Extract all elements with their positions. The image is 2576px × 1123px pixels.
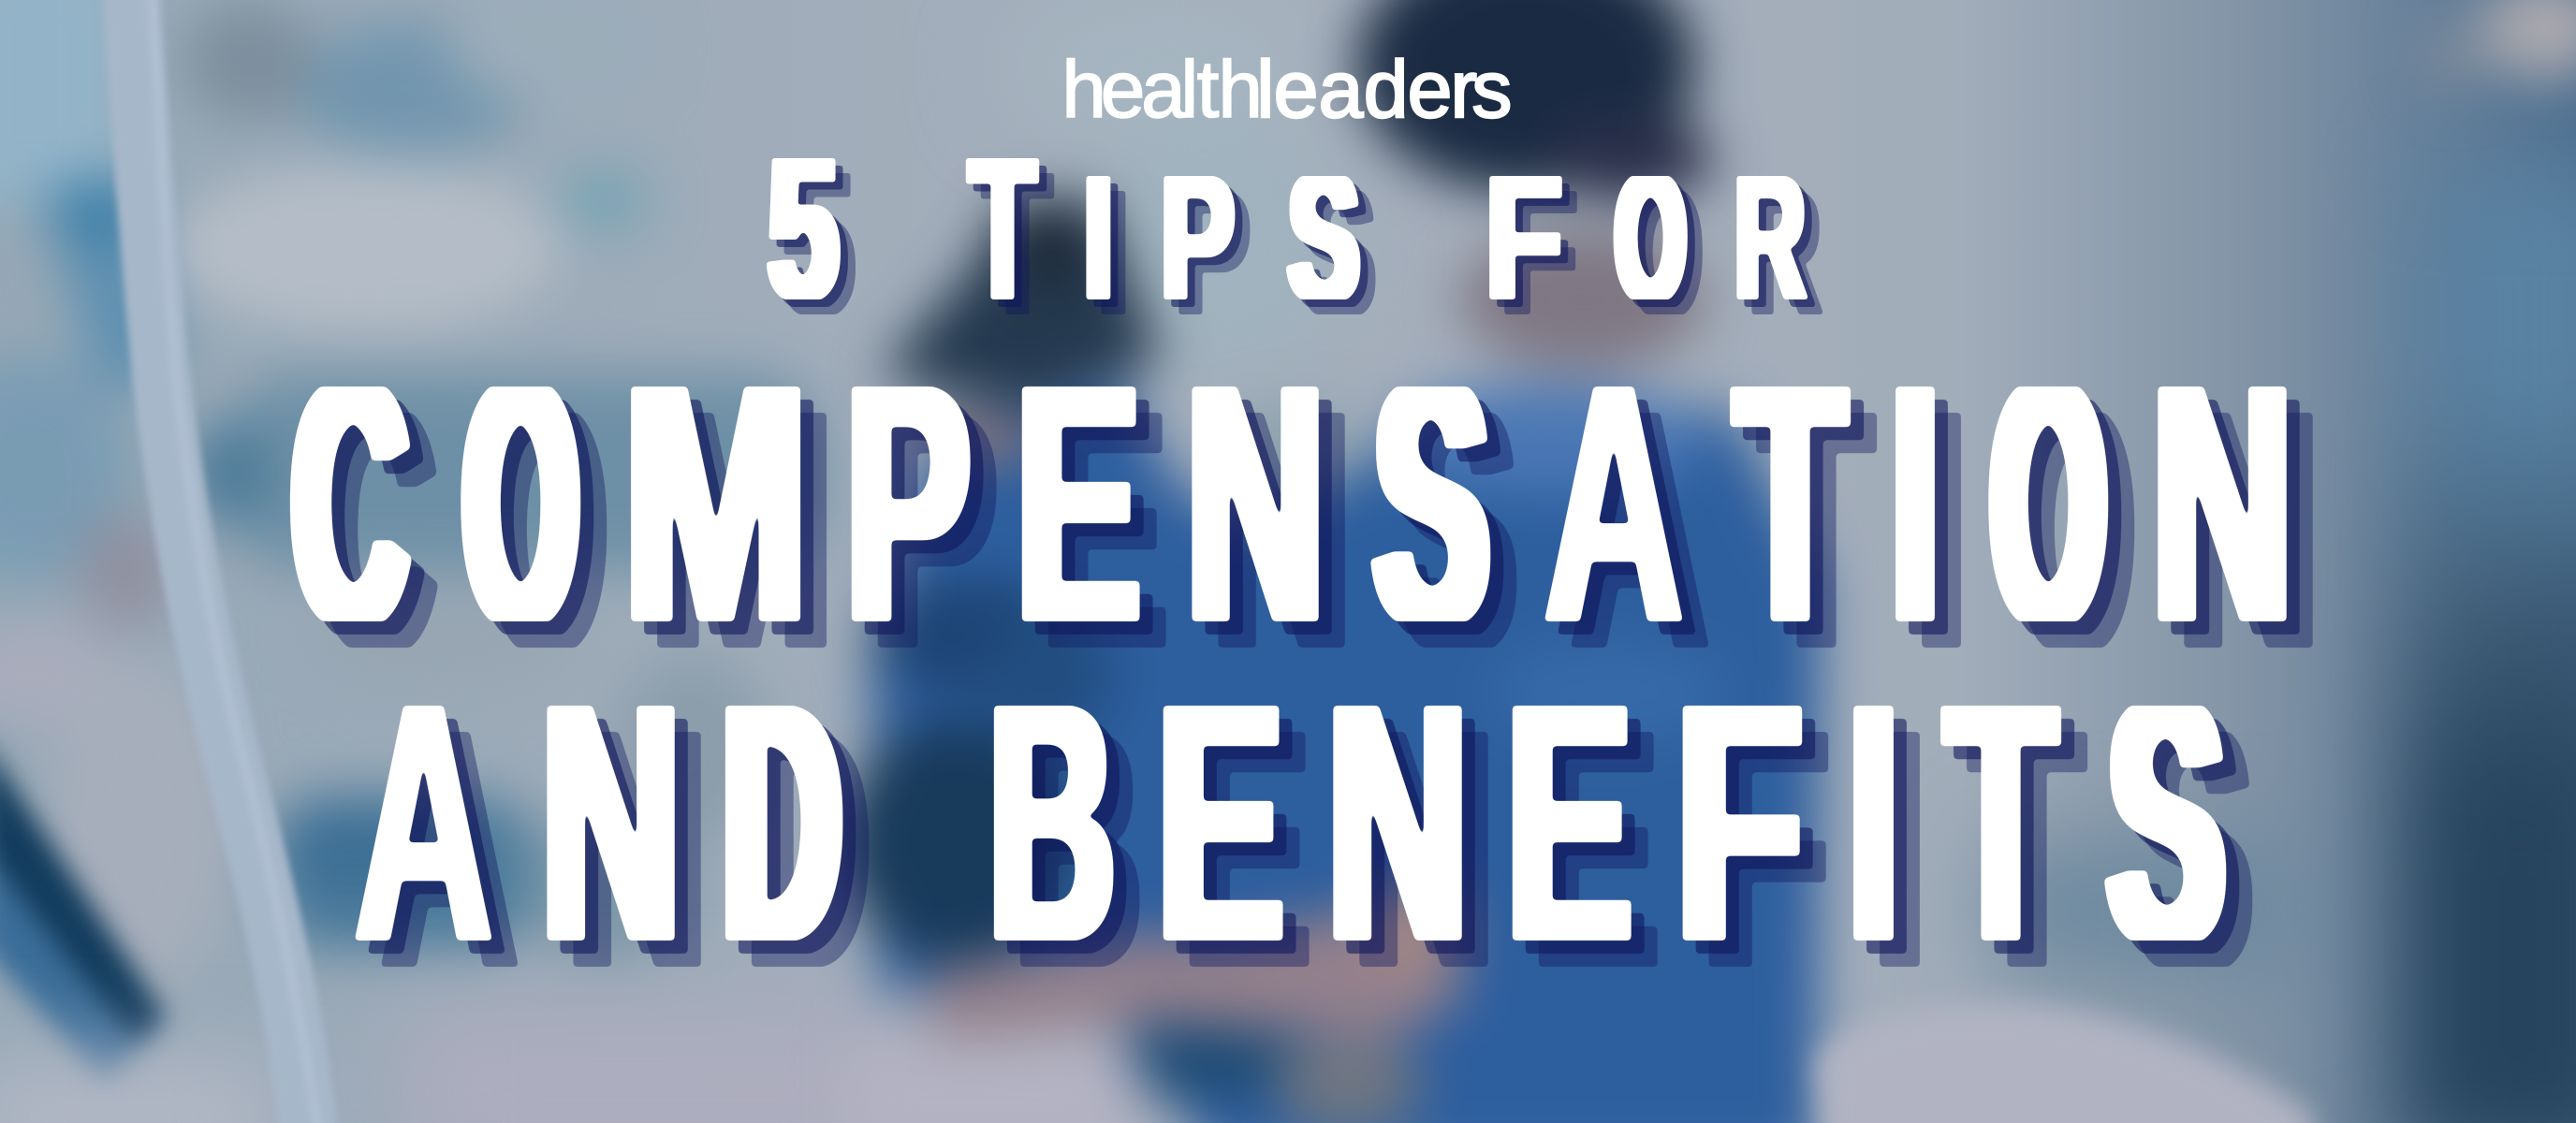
icon: translucent IV tube — [131, 0, 318, 1123]
title line: 5 TIPS FOR: O — [1616, 136, 1686, 340]
right side: wall, dark edge and bed sheet — [1816, 0, 2576, 1123]
title line: 5 TIPS FOR: 5 — [768, 117, 839, 343]
title line: AND BENEFITS: N — [1326, 633, 1469, 1012]
nurses: scrubs, skin and dark hair — [842, 0, 1821, 1123]
title line: AND BENEFITS: F — [1676, 634, 1803, 1012]
title: 5 tips for compensation and benefits — [293, 117, 2293, 1017]
title line: COMPENSATION: N — [2151, 314, 2293, 693]
logo: healthleaders: leaders — [1256, 45, 1512, 135]
title line: AND BENEFITS: D — [724, 634, 841, 1013]
title line: COMPENSATION: T — [1734, 314, 1846, 693]
title line: 5 TIPS FOR: F — [1485, 139, 1563, 336]
title line: COMPENSATION: O — [1992, 307, 2105, 698]
title line: AND BENEFITS: S — [2109, 628, 2224, 1017]
title line: COMPENSATION: C — [293, 309, 406, 698]
title line: AND BENEFITS: A — [354, 634, 493, 1012]
title line: COMPENSATION: M — [622, 314, 809, 693]
title line: AND BENEFITS: E — [1157, 634, 1283, 1013]
title line: AND BENEFITS: I — [1848, 634, 1899, 1013]
title line: 5 TIPS FOR — [766, 158, 1822, 314]
title line: 5 TIPS FOR: T — [968, 117, 1037, 343]
title line: AND BENEFITS: T — [1945, 634, 2056, 1012]
title line: COMPENSATION: S — [1375, 309, 1487, 699]
logo: healthleaders: health — [1061, 45, 1263, 135]
title line: COMPENSATION: N — [1186, 314, 1325, 693]
title line: COMPENSATION: A — [1544, 314, 1684, 693]
title line: COMPENSATION: I — [1890, 314, 1940, 693]
title line: COMPENSATION: P — [845, 314, 970, 693]
title line: COMPENSATION: O — [464, 307, 578, 698]
title line: 5 TIPS FOR: R — [1734, 139, 1807, 337]
title line: AND BENEFITS — [356, 706, 2252, 967]
left equipment: soft blue and pale blurred shapes — [0, 0, 908, 1123]
title line: AND BENEFITS: B — [988, 634, 1115, 1013]
title line: COMPENSATION — [290, 386, 2313, 648]
title line: AND BENEFITS: N — [541, 634, 681, 1012]
title line: COMPENSATION: E — [1016, 314, 1140, 693]
title line: 5 TIPS FOR: S — [1289, 136, 1359, 340]
title line: 5 TIPS FOR: I — [1082, 139, 1115, 336]
title line: 5 TIPS FOR: P — [1160, 139, 1236, 337]
title line: AND BENEFITS: E — [1506, 634, 1632, 1013]
